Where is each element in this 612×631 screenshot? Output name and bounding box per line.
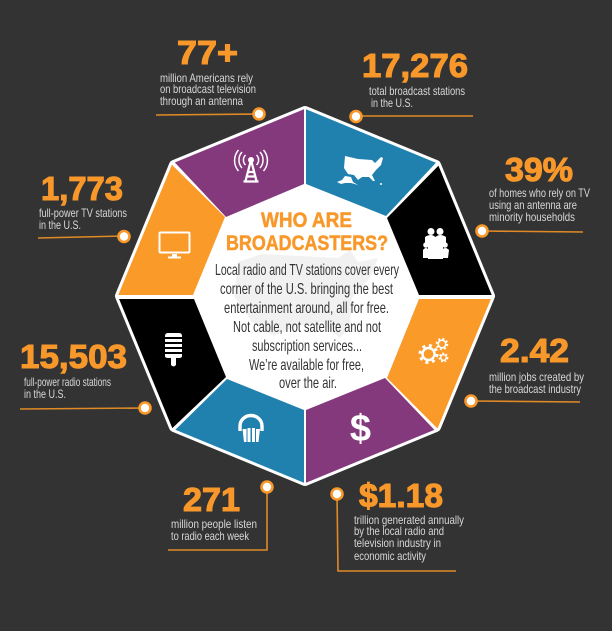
heading [226, 209, 388, 255]
icon: microphone [165, 333, 182, 366]
centre text block: We’re available for free, [249, 357, 364, 374]
callout: 2.42 [466, 332, 584, 406]
callout: 39%: using an antenna are [489, 198, 577, 212]
callout: 77+: million Americans rely [160, 71, 253, 85]
callout: 1,773: 1,773 [41, 170, 123, 207]
segment: purple bottom [306, 378, 434, 483]
octagon wheel [115, 106, 495, 486]
callout: 271: million people listen [171, 517, 257, 531]
segment: purple top [174, 109, 304, 217]
icon: dollar sign: $ [350, 408, 371, 450]
centre text block: corner of the U.S. bringing the best [220, 281, 393, 298]
segment: orange right [387, 299, 491, 428]
callout: 1,773 [38, 170, 130, 242]
callout: 1,773: full-power TV stations [39, 206, 127, 220]
callout: $1.18 [332, 477, 464, 571]
centre text block: Local radio and TV stations cover every [215, 262, 399, 279]
callout: $1.18: television industry in [354, 536, 441, 550]
callout: 2.42: million jobs created by [489, 370, 584, 384]
callout: 77+ [156, 34, 264, 120]
callout: 15,503: in the U.S. [24, 387, 66, 401]
segment: black right [387, 166, 492, 295]
callout: 17,276 [350, 47, 473, 122]
callout: 39%: minority households [489, 210, 575, 224]
segment: teal top [306, 109, 436, 216]
heading: WHO ARE [261, 209, 352, 232]
callout: 271: to radio each week [171, 529, 250, 543]
callout: 39% [476, 151, 590, 236]
callout: 77+: through an antenna [160, 94, 243, 108]
callout: $1.18: economic activity [354, 549, 426, 563]
callout: 2.42: the broadcast industry [489, 382, 581, 396]
heading: BROADCASTERS? [226, 232, 388, 255]
icon: antenna tower [235, 150, 267, 182]
callout: 77+: 77+ [177, 34, 238, 71]
segment: teal bottom [175, 379, 304, 483]
faded US map behind centre text [234, 250, 378, 338]
callout: 15,503: full-power radio stations [24, 375, 111, 389]
callout: 39%: 39% [505, 151, 573, 188]
segments group [118, 109, 492, 483]
callout: 271: 271 [183, 481, 240, 518]
callout: $1.18: $1.18 [359, 477, 443, 514]
callout: 17,276: total broadcast stations [369, 84, 465, 98]
callout: 15,503: 15,503 [20, 338, 127, 375]
icon: television [160, 232, 190, 258]
callout: 17,276: in the U.S. [371, 96, 413, 110]
callout: $1.18: trillion generated annually [354, 513, 464, 527]
icon: family [423, 228, 449, 259]
callout: 77+: on broadcast television [160, 82, 256, 96]
centre text block: Not cable, not satellite and not [233, 319, 381, 336]
centre text block: over the air. [279, 375, 337, 392]
callout: $1.18: by the local radio and [354, 524, 444, 538]
callout: 1,773: in the U.S. [39, 218, 81, 232]
icon: headphones [240, 416, 262, 442]
callout: 2.42: 2.42 [500, 332, 569, 369]
icon: gears [420, 339, 448, 362]
icon: USA map [337, 156, 383, 185]
callout: 17,276: 17,276 [362, 47, 468, 84]
centre text block [215, 262, 399, 392]
centre text block: subscription services... [252, 338, 362, 355]
callout: 15,503 [20, 338, 150, 414]
centre text block: entertainment around, all for free. [224, 300, 389, 317]
segment: black left [119, 299, 226, 428]
segment: orange left [118, 164, 225, 295]
callout: 271 [168, 481, 272, 550]
